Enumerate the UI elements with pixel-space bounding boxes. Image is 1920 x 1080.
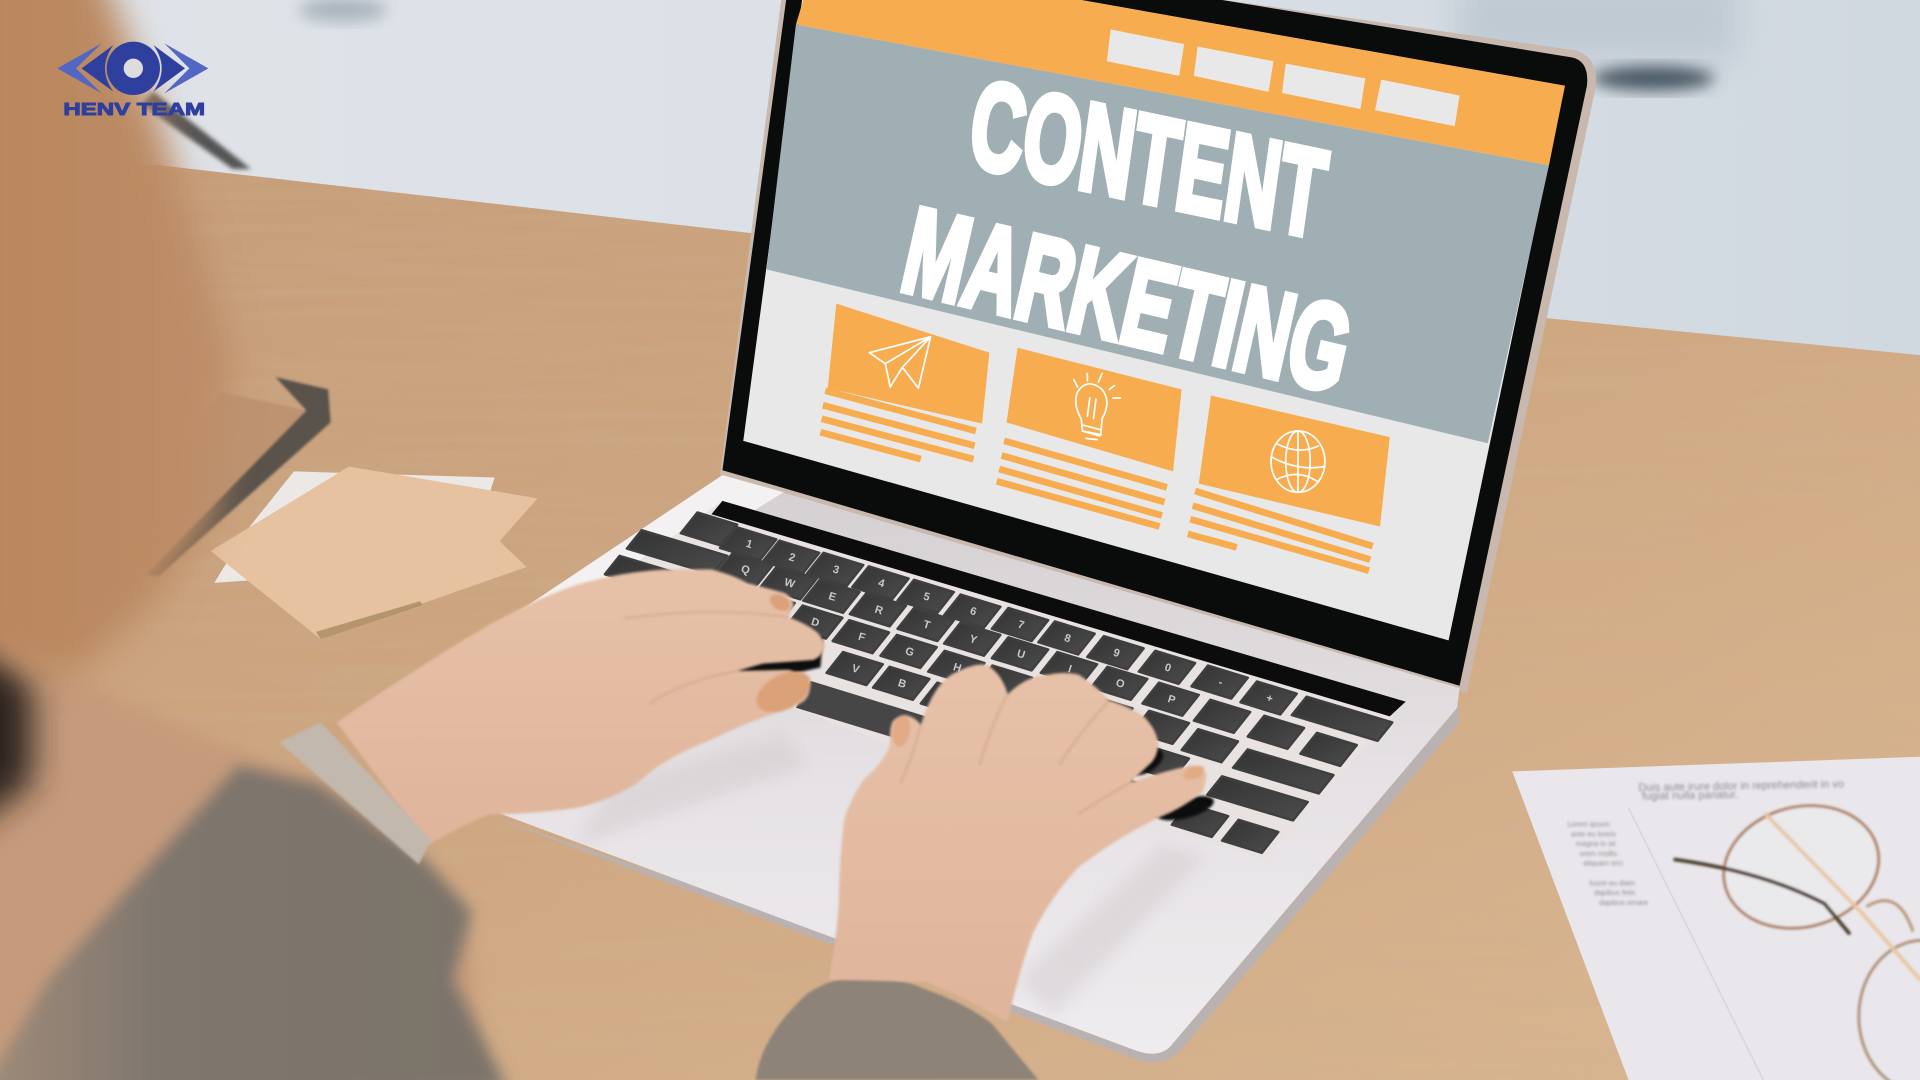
- blurred document text: magna in sit: [1576, 839, 1615, 848]
- glasses: [1675, 790, 1920, 1080]
- icon: globe: [1271, 431, 1325, 492]
- blurred document text: ante eu lorem: [1571, 829, 1616, 838]
- blurred document text: fugiat nulla pariatur.: [1642, 789, 1738, 803]
- key labels: T: [922, 619, 932, 632]
- key labels: F: [857, 631, 867, 644]
- key labels: G: [904, 645, 915, 659]
- laptop base: [375, 475, 1460, 1063]
- finger gaps: [900, 694, 1130, 814]
- key labels: 4: [877, 577, 887, 591]
- logo wordmark: HENV TEAM: [63, 99, 205, 119]
- dark clothing at neck: [0, 624, 32, 833]
- wrist watch band: [279, 722, 431, 864]
- document on desk: [1512, 757, 1920, 1080]
- blurred document text: orem mollis: [1580, 849, 1617, 858]
- left sleeve: [0, 765, 508, 1080]
- key labels: R: [873, 604, 884, 618]
- card 3: globe: [1188, 396, 1390, 571]
- right hand: [829, 664, 1206, 1022]
- keyboard well: [618, 501, 1406, 860]
- orange header band: [796, 0, 1565, 165]
- sticky notes: [211, 467, 538, 639]
- key labels: W: [783, 576, 797, 591]
- blurred document text: fusce eu diam: [1589, 878, 1635, 887]
- fingernail: [767, 591, 793, 614]
- blurred document text: aliquam orci: [1583, 859, 1623, 868]
- icon: light bulb: [1074, 373, 1120, 440]
- title: content: CONTENT: [962, 54, 1334, 264]
- key labels: 7: [1016, 619, 1026, 632]
- touch bar: [711, 501, 1406, 716]
- laptop lid: [720, 0, 1596, 693]
- logo eye: [82, 42, 185, 95]
- key labels: 3: [831, 564, 841, 577]
- key labels: H: [952, 661, 963, 675]
- person: neck and shoulder: [0, 612, 490, 1080]
- key labels: U: [1015, 648, 1026, 662]
- keyboard keys: [605, 512, 1392, 853]
- finger gaps: [624, 612, 789, 704]
- key labels: 6: [968, 605, 978, 618]
- key labels: 9: [1112, 647, 1121, 660]
- screen: [743, 0, 1565, 640]
- key labels: Q: [740, 563, 752, 577]
- text lines: [820, 391, 976, 459]
- key labels: +: [1265, 692, 1274, 705]
- hair: [0, 0, 233, 680]
- blurred document text: [1567, 778, 1844, 907]
- thumbnail: [750, 663, 818, 721]
- key labels: 0: [1163, 662, 1173, 675]
- blurred document text: dapibus felis: [1594, 888, 1635, 897]
- key labels: 5: [922, 590, 931, 604]
- key labels: Y: [968, 633, 979, 647]
- fingernail: [890, 714, 912, 748]
- card 2: light bulb: [997, 348, 1182, 527]
- key labels: E: [827, 590, 838, 604]
- key labels: [740, 538, 1274, 707]
- key labels: P: [1166, 693, 1177, 707]
- key labels: O: [1114, 677, 1126, 691]
- finger shadows on keyboard: [686, 637, 1216, 825]
- title: marketing: MARKETING: [892, 182, 1363, 419]
- dark notebook on desk: [122, 377, 331, 576]
- blurred document text: Duis aute irure dolor in reprehenderit in vo: [1638, 778, 1844, 794]
- key labels: 2: [787, 551, 797, 565]
- key labels: D: [810, 616, 821, 630]
- card 1: paper plane: [820, 304, 989, 459]
- key labels: 8: [1063, 632, 1072, 645]
- logo chevrons: [57, 43, 208, 93]
- logo: henv team: [57, 42, 208, 119]
- text lines: [997, 441, 1167, 527]
- icon: paper plane: [869, 337, 931, 388]
- grey hero band: [767, 24, 1549, 443]
- text lines: [1188, 491, 1373, 571]
- key labels: I: [1067, 663, 1073, 676]
- deck: [375, 475, 1460, 1054]
- nav buttons: [1107, 29, 1460, 126]
- key labels: -: [1217, 677, 1224, 689]
- key labels: V: [850, 663, 861, 676]
- left hand: [337, 569, 825, 845]
- fingernail: [1181, 763, 1206, 782]
- key labels: 1: [744, 538, 754, 551]
- blurred document text: dapibus ornare: [1599, 898, 1648, 907]
- blurred office background: [0, 0, 1920, 392]
- trackpad shadows: [576, 735, 1206, 1016]
- base side edge: [496, 693, 1460, 1063]
- blurred document text: Lorem ipsum: [1567, 820, 1610, 829]
- right sleeve: [756, 977, 1038, 1080]
- key labels: B: [897, 677, 908, 691]
